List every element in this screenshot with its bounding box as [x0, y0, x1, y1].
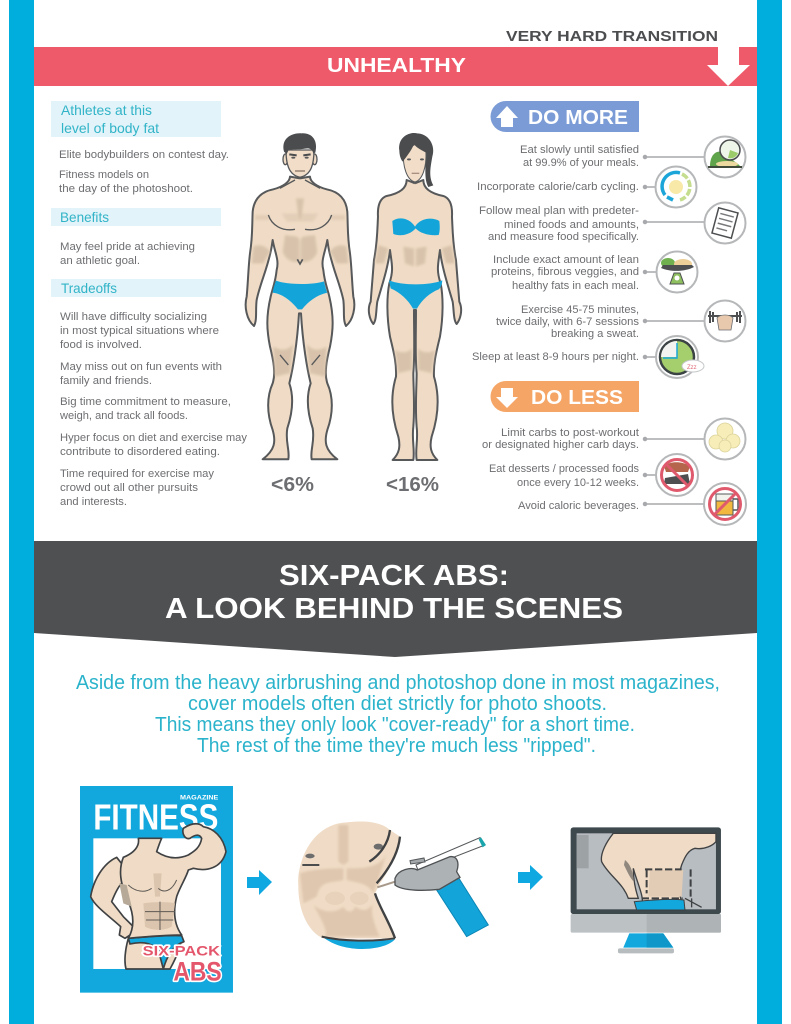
- panel: athletes at this level: Elite bodybuilders on contest day.: [59, 149, 229, 161]
- panel: benefits: Benefits: [60, 209, 109, 225]
- male figure: [246, 133, 354, 459]
- panel: athletes at this level: Athletes at this: [61, 102, 152, 118]
- cover headline: SIX-PACK: [143, 943, 220, 959]
- panel: tradeoffs: crowd out all other pursuits: [60, 482, 199, 494]
- intro paragraph: This means they only look "cover-ready" for a short time.: [155, 714, 635, 736]
- magazine title: FITNESS: [93, 796, 218, 837]
- cover headline: [143, 943, 222, 987]
- panel: tradeoffs: contribute to disordered eating.: [60, 446, 220, 458]
- do more list: Eat slowly until satisfied: [520, 144, 639, 156]
- retouched torso on screen: [601, 833, 716, 910]
- panel: tradeoffs: Tradeoffs: [61, 280, 117, 296]
- icon: no caloric beverages: [704, 483, 746, 525]
- intro paragraph: cover models often diet strictly for photo shoots.: [188, 693, 607, 715]
- do more list: Incorporate calorie/carb cycling.: [477, 181, 639, 193]
- panel: tradeoffs: in most typical situations where: [60, 325, 219, 337]
- female body fat label: <16%: [386, 474, 439, 496]
- panel: athletes at this level: [51, 101, 229, 195]
- panel: tradeoffs: Will have difficulty socializing: [60, 311, 207, 323]
- do more list: breaking a sweat.: [551, 328, 639, 340]
- icon: sleep clock: [656, 336, 704, 378]
- do less list: or designated higher carb days.: [482, 439, 639, 451]
- do more list: and measure food specifically.: [488, 231, 639, 243]
- do less list: once every 10-12 weeks.: [517, 477, 639, 489]
- icon: barbell exercise: [704, 300, 746, 342]
- do more list: [472, 144, 640, 363]
- do less list: Eat desserts / processed foods: [489, 463, 639, 475]
- panel: tradeoffs: Big time commitment to measure,: [60, 396, 231, 408]
- bodybuilder figure: [91, 824, 226, 969]
- do more list: Follow meal plan with predeter-: [479, 205, 639, 217]
- intro paragraph: Aside from the heavy airbrushing and photoshop done in most magazines,: [76, 672, 720, 694]
- do more heading: [491, 101, 639, 132]
- icon connectors: [644, 156, 705, 506]
- panel: benefits: May feel pride at achieving: [60, 241, 195, 253]
- transition label: VERY HARD TRANSITION: [506, 28, 718, 45]
- do more list: mined foods and amounts,: [504, 219, 639, 231]
- female bikini top: [392, 218, 440, 235]
- do less list: [482, 427, 639, 512]
- female head: [399, 133, 433, 187]
- banner heading: UNHEALTHY: [327, 55, 467, 77]
- panel: tradeoffs: weigh, and track all foods.: [59, 410, 188, 422]
- intro paragraph: The rest of the time they're much less "ripped".: [197, 735, 596, 757]
- male body fat label: <6%: [271, 474, 314, 496]
- panel: tradeoffs: family and friends.: [60, 375, 152, 387]
- male head: [283, 133, 317, 177]
- injection gun: [377, 837, 488, 937]
- panel: benefits: an athletic goal.: [60, 255, 140, 267]
- icon: meal plan clipboard: [704, 202, 746, 244]
- panel: tradeoffs: food is involved.: [60, 339, 142, 351]
- panel: tradeoffs: Time required for exercise may: [60, 468, 215, 480]
- panel: tradeoffs: Hyper focus on diet and exercise may: [60, 432, 247, 444]
- intro paragraph: [76, 672, 720, 757]
- panel: athletes at this level: level of body fat: [61, 120, 159, 136]
- icon: down arrow: [707, 47, 750, 86]
- panel: tradeoffs: and interests.: [60, 496, 127, 508]
- panel: tradeoffs: [51, 279, 247, 508]
- magazine label: MAGAZINE: [180, 794, 219, 801]
- cover headline: ABS: [173, 957, 222, 987]
- do more list: at 99.9% of your meals.: [523, 157, 639, 169]
- panel: unhealthy banner: [34, 47, 757, 86]
- icon: slow meal plate: [704, 136, 746, 178]
- panel: benefits: [51, 208, 221, 267]
- icon: calorie cycle: [656, 166, 696, 208]
- abs close-up: [298, 821, 400, 949]
- abs injection illustration: [298, 821, 488, 949]
- panel: six-pack abs dark banner: [34, 541, 757, 657]
- arrow: magazine to injection: [247, 870, 272, 895]
- male briefs: [273, 281, 327, 309]
- panel: athletes at this level: Fitness models on: [59, 169, 149, 181]
- icon: carbs popcorn: [704, 418, 746, 460]
- do more list: Exercise 45-75 minutes,: [521, 304, 639, 316]
- arrow: injection to photoshop: [518, 865, 543, 890]
- icon: food scale: [656, 252, 698, 292]
- icon: up arrow: [496, 106, 518, 127]
- do more list: Include exact amount of lean: [493, 254, 639, 266]
- section title: SIX-PACK ABS:: [279, 560, 509, 592]
- icon: sleep clock: Zzz: [687, 365, 697, 371]
- panel: six-pack abs dark banner: A LOOK BEHIND THE SCENES: [165, 593, 623, 625]
- female figure: [369, 133, 461, 460]
- icon: down arrow: [496, 388, 518, 408]
- do more list: healthy fats in each meal.: [512, 280, 639, 292]
- magazine cover illustration: [80, 786, 233, 993]
- do more heading: DO MORE: [528, 107, 628, 129]
- do more list: proteins, fibrous veggies, and: [491, 266, 639, 278]
- do more list: Sleep at least 8-9 hours per night.: [472, 351, 639, 363]
- photoshop monitor illustration: [571, 827, 721, 953]
- do more list: twice daily, with 6-7 sessions: [496, 316, 640, 328]
- do less list: Limit carbs to post-workout: [501, 427, 639, 439]
- left blue border stripe: [9, 0, 34, 1024]
- icon: no desserts: [656, 454, 698, 496]
- do less heading: [490, 381, 639, 412]
- panel: athletes at this level: the day of the photoshoot.: [59, 183, 193, 195]
- do less list: Avoid caloric beverages.: [518, 500, 639, 512]
- right blue border stripe: [757, 0, 782, 1024]
- do less heading: DO LESS: [531, 387, 623, 409]
- female bikini bottom: [389, 280, 442, 309]
- panel: tradeoffs: May miss out on fun events with: [60, 361, 222, 373]
